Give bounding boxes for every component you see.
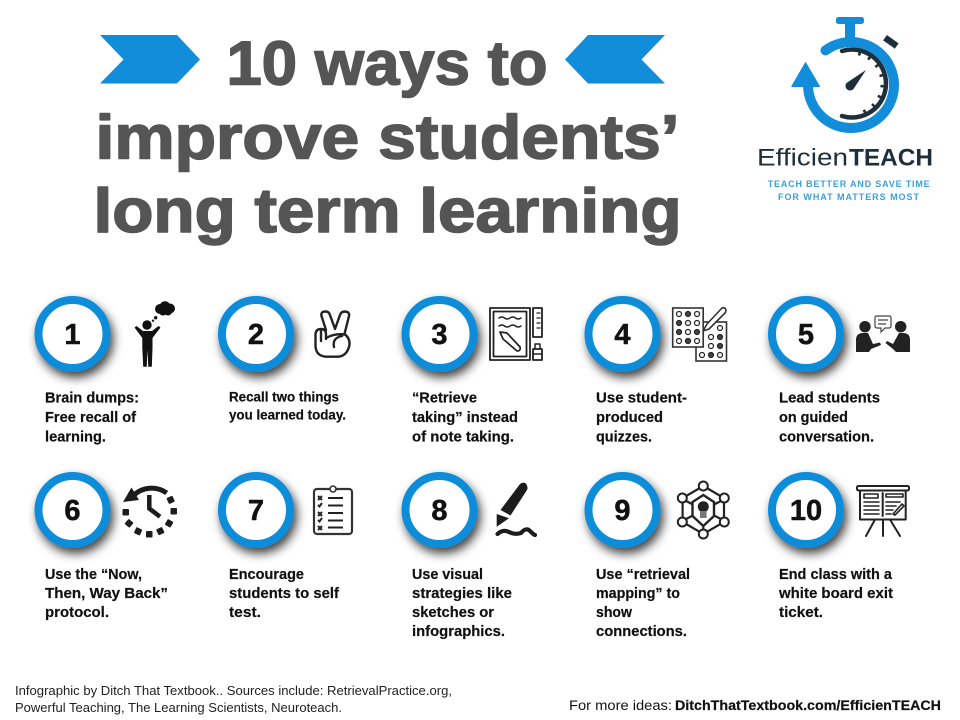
text: item 5: conversation. <box>779 430 874 446</box>
item 5: guided conversation <box>772 300 910 446</box>
text: item 8: strategies like <box>412 586 512 602</box>
icon: peace hand <box>316 312 350 357</box>
logo tagline: TEACH BETTER AND SAVE TIME <box>768 179 930 189</box>
text: item 9: Use “retrieval <box>596 567 690 583</box>
text: item 3: taking” instead <box>412 410 518 426</box>
item 2: recall two things <box>222 300 350 423</box>
item 6: now then way back <box>38 476 177 621</box>
text: item 2: you learned today. <box>229 408 346 423</box>
logo: EfficienTEACH <box>757 17 933 202</box>
logo tagline <box>768 179 930 202</box>
text: item 2: Recall two things <box>229 390 339 405</box>
text: item 1 <box>45 390 139 446</box>
number badge 1 <box>38 300 106 368</box>
text: item 7: test. <box>229 605 261 621</box>
footer: more ideas link: DitchThatTextbook.com/EfficienTEACH <box>675 698 941 713</box>
number badge 5: 5 <box>798 319 814 351</box>
item 4: student-produced quizzes <box>588 300 726 446</box>
number badge 9: 9 <box>614 495 631 527</box>
text: item 7 <box>229 567 339 621</box>
item 8: visual strategies <box>406 476 535 640</box>
item 1: brain dumps <box>38 300 175 446</box>
text: item 10: white board exit <box>778 586 893 602</box>
number badge 7 <box>222 476 290 544</box>
footer: more ideas link <box>569 698 941 713</box>
text: item 8 <box>412 567 512 640</box>
icon: stopwatch <box>792 17 897 128</box>
text: item 7: Encourage <box>229 567 304 583</box>
title: long term learning <box>94 177 682 246</box>
text: item 9: connections. <box>596 624 687 640</box>
icon: marker and squiggle <box>497 483 535 535</box>
text: item 4: produced <box>596 410 663 426</box>
text: item 10 <box>778 567 893 621</box>
text: item 6: Then, Way Back” <box>45 586 168 602</box>
item 3: retrieve taking <box>406 300 542 446</box>
icon: clock with back arrow <box>122 488 177 538</box>
text: item 8: sketches or <box>412 605 494 621</box>
number badge 4: 4 <box>614 319 631 351</box>
number badge 9 <box>588 476 656 544</box>
footer: sources <box>15 684 452 715</box>
number badge 7: 7 <box>248 495 264 527</box>
number badge 1: 1 <box>64 319 81 351</box>
icon: left blue ribbon <box>100 35 200 84</box>
logo tagline: FOR WHAT MATTERS MOST <box>778 192 920 202</box>
text: item 4: quizzes. <box>596 430 652 446</box>
icon: person with thought cloud <box>134 301 175 367</box>
number badge 8 <box>406 476 474 544</box>
title <box>94 30 682 246</box>
title: improve students’ <box>96 104 680 172</box>
footer: more ideas link: For more ideas: <box>569 698 672 713</box>
number badge 5 <box>772 300 840 368</box>
icon: right blue ribbon <box>565 35 665 84</box>
logo wordmark: Efficien <box>757 145 848 172</box>
number badge 8: 8 <box>431 495 448 527</box>
text: item 4 <box>596 390 687 446</box>
text: item 8: infographics. <box>412 624 505 640</box>
text: item 6: Use the “Now, <box>45 567 142 583</box>
text: item 3: “Retrieve <box>412 390 477 406</box>
number badge 10 <box>772 476 840 544</box>
item 10: white board exit ticket <box>772 476 909 621</box>
text: item 5: Lead students <box>779 390 880 406</box>
text: item 9: mapping” to <box>596 586 680 602</box>
number badge 3: 3 <box>431 319 448 351</box>
logo wordmark <box>757 145 933 172</box>
text: item 2 <box>229 390 346 423</box>
icon: presentation board <box>857 486 909 536</box>
text: item 9 <box>596 567 690 640</box>
icon: two people talking <box>856 316 910 352</box>
footer: sources: Powerful Teaching, The Learning Scientists, Neuroteach. <box>15 701 342 715</box>
text: item 8: Use visual <box>412 567 483 583</box>
item 7: self test <box>222 476 352 621</box>
text: item 3 <box>412 390 518 446</box>
text: item 1: Brain dumps: <box>45 390 139 406</box>
text: item 1: learning. <box>45 430 106 446</box>
text: item 1: Free recall of <box>45 410 136 426</box>
number badge 2: 2 <box>248 319 264 351</box>
icon: network with light bulb <box>678 482 729 538</box>
icon: answer sheets and pencil <box>673 308 726 361</box>
footer: sources: Infographic by Ditch That Textbook.. Sources include: RetrievalPractice.org, <box>15 684 452 698</box>
text: item 3: of note taking. <box>412 430 514 446</box>
item 9: retrieval mapping <box>588 476 729 640</box>
number badge 10: 10 <box>790 495 822 527</box>
text: item 10: End class with a <box>779 567 893 583</box>
text: item 5: on guided <box>779 410 848 426</box>
text: item 9: show <box>596 605 633 621</box>
text: item 6 <box>45 567 168 621</box>
number badge 6 <box>38 476 106 544</box>
text: item 4: Use student- <box>596 390 687 406</box>
text: item 5 <box>779 390 880 446</box>
text: item 6: protocol. <box>45 605 109 621</box>
text: item 10: ticket. <box>779 605 823 621</box>
number badge 4 <box>588 300 656 368</box>
icon: clipboard checklist <box>314 486 352 534</box>
number badge 3 <box>406 300 474 368</box>
title: 10 ways to <box>226 30 548 98</box>
text: item 7: students to self <box>229 586 339 602</box>
icon: notebook, ruler and eraser <box>490 308 542 360</box>
number badge 6: 6 <box>64 495 81 527</box>
logo wordmark: TEACH <box>849 145 933 172</box>
